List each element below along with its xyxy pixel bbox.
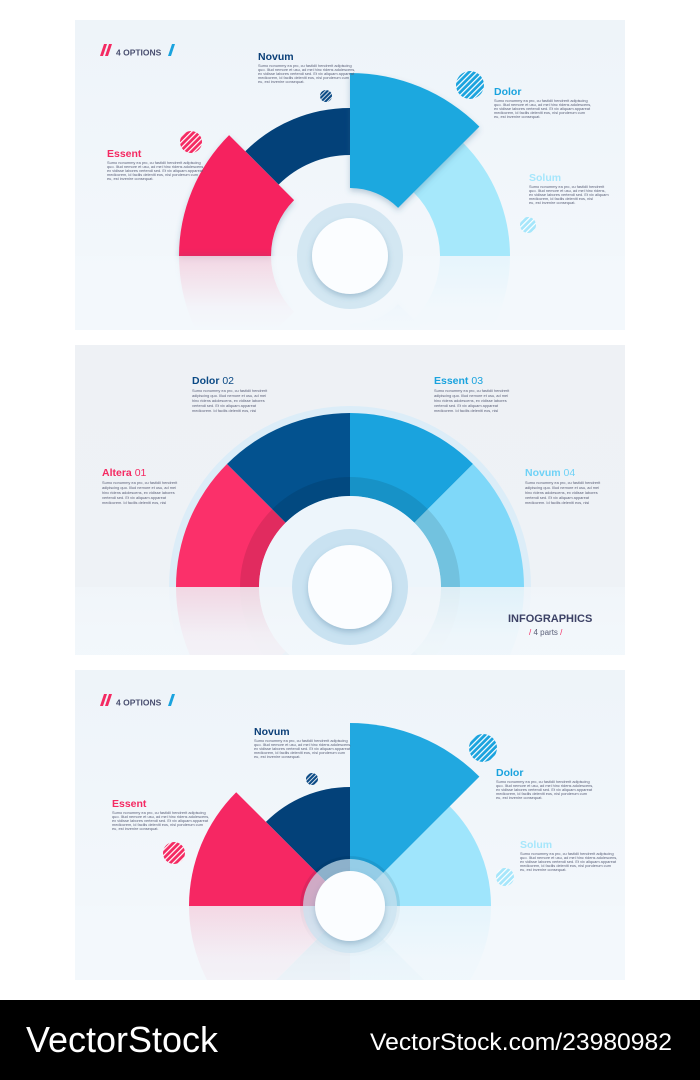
label: Solum: Solum: [529, 172, 561, 184]
label: Dolor 02: hinc ridens adolescens, ex vidisse labores: [192, 398, 265, 403]
label: Essent: mediocrem, id facilis deleniti eos, nisl ponderum cum: [107, 172, 198, 177]
label: Novum: ex vidisse labores vertendi sed. Et vix aliquam appareat: [258, 71, 355, 76]
label: Essent: eu, est invenire consequat.: [107, 176, 154, 181]
label: Solum: quo. Illud nemore et usu, ad mei hinc ridens,: [529, 188, 606, 193]
label: Novum: quo. Illud nemore et usu, ad mei hinc ridens adolescens,: [258, 67, 355, 72]
icon: hatched light: [520, 217, 536, 233]
footer: watermark bar: VectorStock: [26, 1019, 219, 1060]
label: Novum: eu, est invenire consequat.: [254, 754, 301, 759]
label: Essent: [112, 798, 209, 831]
panel: bottom chart (4 options, pie): [75, 670, 625, 980]
label: Dolor: ex vidisse labores vertendi sed. Et vix aliquam appareat: [496, 787, 593, 792]
label: Dolor: ex vidisse labores vertendi sed. Et vix aliquam appareat: [494, 106, 591, 111]
label: Novum 04: adipiscing quo. Illud nemore et usu, ad mei: [525, 485, 599, 490]
icon: navy dot: [320, 90, 332, 102]
label: Dolor: Sumo nonummy ea pro, cu fastidii hendrerit adipiscing: [496, 779, 590, 784]
label: Dolor: quo. Illud nemore et usu, ad mei hinc ridens adolescens,: [496, 783, 593, 788]
label: Solum: quo. Illud nemore et usu, ad mei hinc ridens adolescens,: [520, 855, 617, 860]
logo: 4 options: 4 OPTIONS: [116, 698, 162, 708]
label: Dolor: [494, 86, 591, 119]
footer: watermark bar: [0, 1000, 700, 1080]
label: Solum: ex vidisse labores vertendi sed. Et vix aliquam: [529, 192, 609, 197]
label: Essent: Sumo nonummy ea pro, cu fastidii hendrerit adipiscing: [112, 810, 206, 815]
label: Novum: Novum: [254, 726, 290, 738]
logo: 4 options: [100, 44, 175, 56]
title: infographics 4 parts: [508, 613, 592, 637]
label: Solum: ex vidisse labores vertendi sed. Et vix aliquam appareat: [520, 859, 617, 864]
logo: 4 options: [100, 694, 175, 706]
label: Essent: eu, est invenire consequat.: [112, 826, 159, 831]
label: Dolor: [496, 767, 593, 800]
label: Dolor: mediocrem, id facilis deleniti eos, nisl ponderum cum: [496, 791, 587, 796]
label: Novum: Sumo nonummy ea pro, cu fastidii hendrerit adipiscing: [258, 63, 352, 68]
label: Dolor 02: [192, 375, 268, 413]
label: Novum: Sumo nonummy ea pro, cu fastidii hendrerit adipiscing: [254, 738, 348, 743]
label: Essent: ex vidisse labores vertendi sed. Et vix aliquam appareat: [112, 818, 209, 823]
label: Dolor 02: mediocrem. Id facilis deleniti eos, nisl: [192, 408, 256, 413]
label: Essent: ex vidisse labores vertendi sed. Et vix aliquam appareat: [107, 168, 204, 173]
label: Altera 01: vertendi sed. Et vix aliquam appareat: [102, 495, 167, 500]
label: Novum: Novum: [258, 51, 294, 63]
label: Novum: eu, est invenire consequat.: [258, 79, 305, 84]
label: Essent: Essent: [112, 798, 147, 810]
icon: hatched blue: [456, 71, 484, 99]
label: Altera 01: mediocrem. Id facilis deleniti eos, nisl: [102, 500, 166, 505]
label: Altera 01: Sumo nonummy ea pro, cu fastidii hendrerit: [102, 480, 178, 485]
label: Solum: mediocrem, id facilis deleniti eos, nisl ponderum cum: [520, 863, 611, 868]
label: Novum 04: hinc ridens adolescens, ex vidisse labores: [525, 490, 598, 495]
label: Dolor: Dolor: [496, 767, 523, 779]
label: Novum 04: [525, 467, 601, 505]
label: Solum: Sumo nonummy ea pro, cu fastidii hendrerit: [529, 184, 605, 189]
label: Novum: mediocrem, id facilis deleniti eos, nisl ponderum cum: [258, 75, 349, 80]
icon: navy dot: [306, 773, 318, 785]
label: Novum 04: Novum 04: [525, 467, 575, 479]
label: Dolor: Dolor: [494, 86, 521, 98]
panel: top chart (4 options, rings): [75, 20, 625, 330]
label: Solum: [529, 172, 609, 205]
icon: hatched light: [496, 868, 514, 886]
label: Dolor 02: adipiscing quo. Illud nemore et usu, ad mei: [192, 393, 266, 398]
label: Novum: mediocrem, id facilis deleniti eos, nisl ponderum cum: [254, 750, 345, 755]
chart: segmented half ring: [179, 73, 510, 256]
label: Solum: Solum: [520, 839, 552, 851]
icon: hatched blue: [469, 734, 497, 762]
label: Essent 03: [434, 375, 510, 413]
label: Novum 04: Sumo nonummy ea pro, cu fastidii hendrerit: [525, 480, 601, 485]
label: Novum: [254, 726, 351, 759]
chart: half donut 4 parts: [169, 406, 531, 587]
label: Novum: ex vidisse labores vertendi sed. Et vix aliquam appareat: [254, 746, 351, 751]
center circle: [297, 203, 403, 309]
center circle: [303, 859, 397, 953]
label: Dolor 02: Sumo nonummy ea pro, cu fastidii hendrerit: [192, 388, 268, 393]
label: Essent 03: Essent 03: [434, 375, 483, 387]
icon: hatched pink: [163, 842, 185, 864]
label: Essent 03: Sumo nonummy ea pro, cu fastidii hendrerit: [434, 388, 510, 393]
logo: 4 options: 4 OPTIONS: [116, 48, 162, 58]
label: Dolor 02: vertendi sed. Et vix aliquam appareat: [192, 403, 257, 408]
icon: hatched pink: [180, 131, 202, 153]
label: Essent: quo. Illud nemore et usu, ad mei hinc ridens adolescens,: [112, 814, 209, 819]
label: Altera 01: adipiscing quo. Illud nemore et usu, ad mei: [102, 485, 176, 490]
label: Novum: [258, 51, 355, 84]
label: Novum 04: mediocrem. Id facilis deleniti eos, nisl: [525, 500, 589, 505]
label: Essent: quo. Illud nemore et usu, ad mei hinc ridens adolescens,: [107, 164, 204, 169]
label: Essent 03: mediocrem. Id facilis deleniti eos, nisl: [434, 408, 498, 413]
chart: pie sectors: [189, 723, 491, 956]
label: Essent: mediocrem, id facilis deleniti eos, nisl ponderum cum: [112, 822, 203, 827]
label: Solum: eu, est invenire consequat.: [520, 867, 567, 872]
label: Essent: Essent: [107, 148, 142, 160]
label: Altera 01: [102, 467, 178, 505]
panel: middle chart (4 parts): [75, 345, 625, 655]
label: Dolor: Sumo nonummy ea pro, cu fastidii hendrerit adipiscing: [494, 98, 588, 103]
center circle: [292, 529, 408, 645]
label: Dolor: eu, est invenire consequat.: [494, 114, 541, 119]
footer: watermark bar: VectorStock.com/23980982: [370, 1029, 672, 1056]
title: infographics 4 parts: / 4 parts /: [529, 628, 563, 637]
label: Novum: quo. Illud nemore et usu, ad mei hinc ridens adolescens,: [254, 742, 351, 747]
label: Solum: eu, est invenire consequat.: [529, 200, 576, 205]
label: Altera 01: hinc ridens adolescens, ex vidisse labores: [102, 490, 175, 495]
label: Dolor: mediocrem, id facilis deleniti eos, nisl ponderum cum: [494, 110, 585, 115]
label: Solum: Sumo nonummy ea pro, cu fastidii hendrerit adipiscing: [520, 851, 614, 856]
label: Solum: mediocrem, id facilis deleniti eos, nisl: [529, 196, 593, 201]
label: Dolor: quo. Illud nemore et usu, ad mei hinc ridens adolescens,: [494, 102, 591, 107]
title: infographics 4 parts: INFOGRAPHICS: [508, 613, 592, 625]
label: Essent 03: vertendi sed. Et vix aliquam appareat: [434, 403, 499, 408]
label: Dolor 02: Dolor 02: [192, 375, 234, 387]
label: Novum 04: vertendi sed. Et vix aliquam appareat: [525, 495, 590, 500]
label: Essent 03: hinc ridens adolescens, ex vidisse labores: [434, 398, 507, 403]
label: Essent: Sumo nonummy ea pro, cu fastidii hendrerit adipiscing: [107, 160, 201, 165]
label: Dolor: eu, est invenire consequat.: [496, 795, 543, 800]
label: Essent: [107, 148, 204, 181]
label: Altera 01: Altera 01: [102, 467, 147, 479]
label: Solum: [520, 839, 617, 872]
label: Essent 03: adipiscing quo. Illud nemore et usu, ad mei: [434, 393, 508, 398]
